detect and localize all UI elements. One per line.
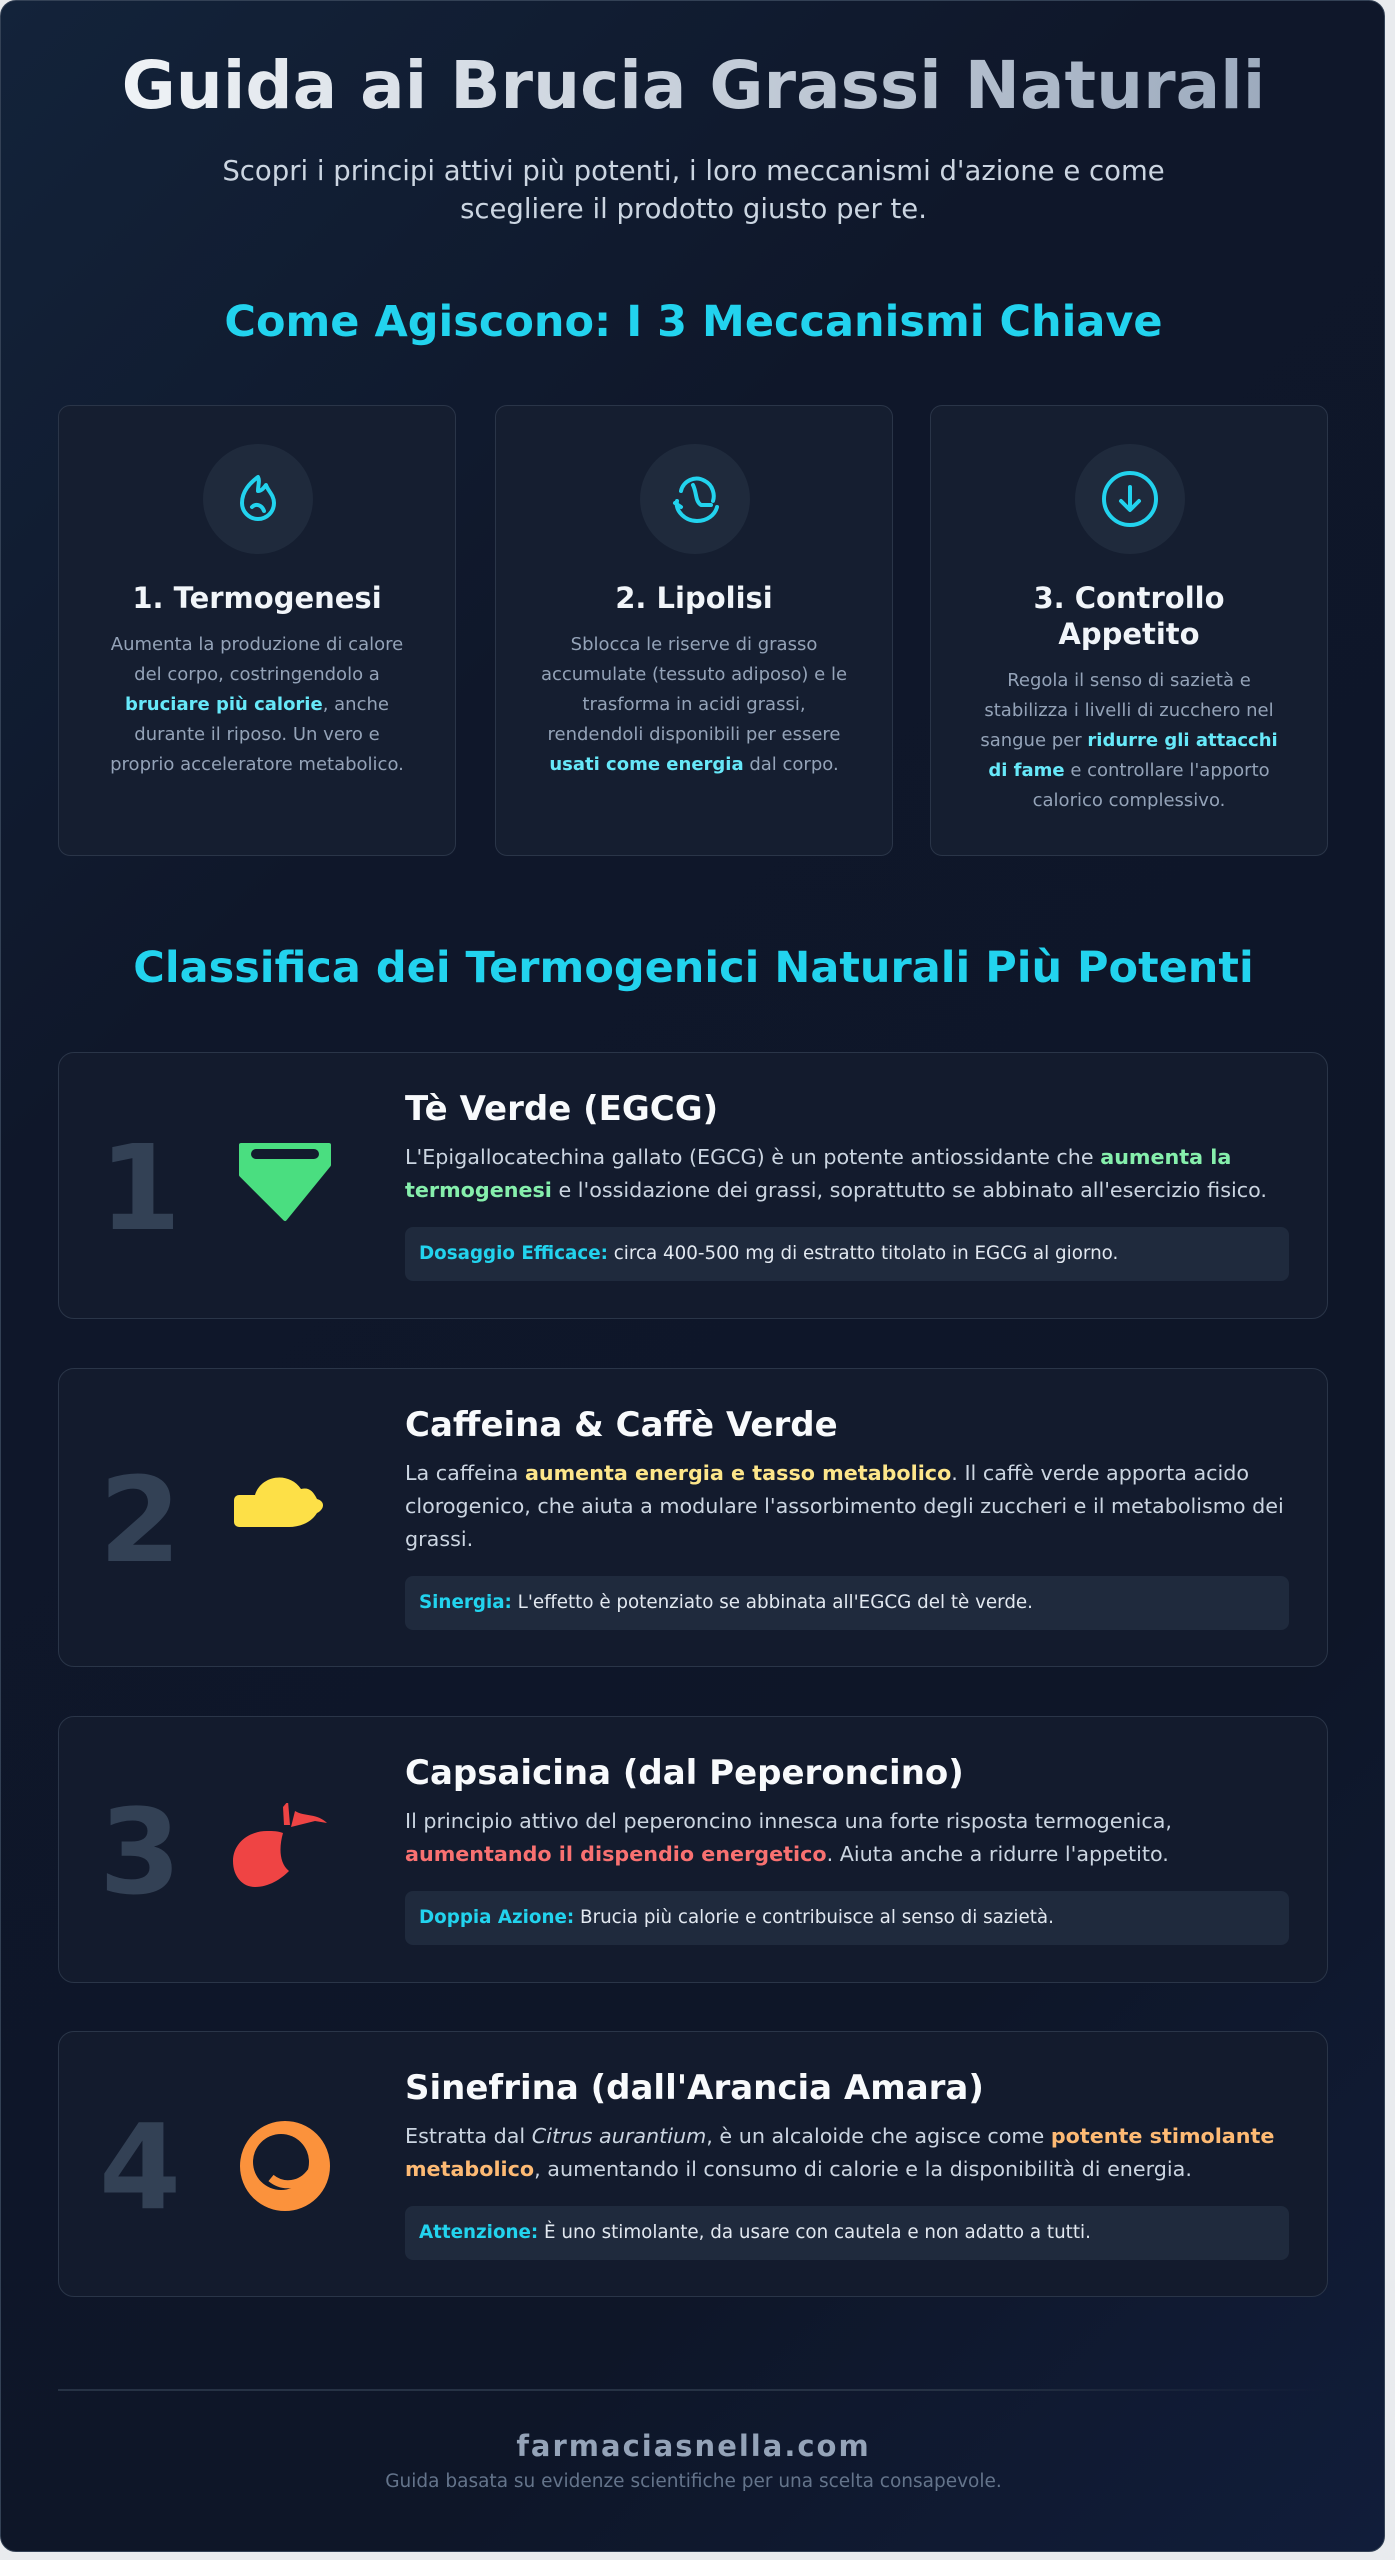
number 2: 2 bbox=[99, 1451, 181, 1589]
text: Tè Verde (EGCG) bbox=[405, 1089, 718, 1129]
card: sinefrina bbox=[58, 2031, 1328, 2297]
title: 1. Termogenesi bbox=[132, 581, 382, 615]
text: Regola il senso di sazietà e stabilizza i livelli di zucchero nel sangue per ridurre gli attacchi di fame e controllare l'apporto calorico complessivo. bbox=[980, 670, 1278, 811]
footer note: Guida basata su evidenze scientifiche per una scelta consapevole. bbox=[385, 2471, 1002, 2492]
callout: Attenzione: È uno stimolante, da usare con cautela e non adatto a tutti. bbox=[419, 2222, 1091, 2243]
title: 3. Controllo bbox=[1033, 581, 1225, 615]
card: caffeina bbox=[58, 1368, 1328, 1667]
callout bbox=[405, 1891, 1289, 1945]
callout: Dosaggio Efficace: circa 400-500 mg di estratto titolato in EGCG al giorno. bbox=[419, 1243, 1118, 1264]
number 3: 3 bbox=[99, 1783, 181, 1921]
text: Aumenta la produzione di calore del corpo, costringendolo a bruciare più calorie, anche durante il riposo. Un vero e proprio acceleratore metabolico. bbox=[110, 634, 404, 775]
card: capsaicina bbox=[58, 1716, 1328, 1983]
icon: lipolysis bbox=[640, 444, 750, 554]
icon: coffee bbox=[234, 1478, 323, 1527]
text: Sinefrina (dall'Arancia Amara) bbox=[405, 2068, 984, 2108]
number 1: 1 bbox=[99, 1119, 181, 1257]
text: Estratta dal Citrus aurantium, è un alcaloide che agisce come potente stimolante metabolico, aumentando il consumo di calorie e la disponibilità di energia. bbox=[405, 2124, 1274, 2181]
text: Sblocca le riserve di grasso accumulate (tessuto adiposo) e le trasforma in acidi grassi, rendendoli disponibili per essere usati come energia dal corpo. bbox=[541, 634, 847, 775]
text: Il principio attivo del peperoncino innesca una forte risposta termogenica, aumentando il dispendio energetico. Aiuta anche a ridurre l'appetito. bbox=[405, 1809, 1172, 1866]
panel: termogenesi bbox=[58, 405, 456, 856]
heading: mechanisms: Come Agiscono: I 3 Meccanismi Chiave bbox=[224, 297, 1163, 347]
icon: arrow down circle bbox=[1075, 444, 1185, 554]
card: te verde bbox=[58, 1052, 1328, 1319]
callout bbox=[405, 1576, 1289, 1630]
icon: tea leaf bbox=[239, 1143, 331, 1222]
callout: Sinergia: L'effetto è potenziato se abbinata all'EGCG del tè verde. bbox=[419, 1592, 1033, 1613]
icon: flame bbox=[203, 444, 313, 554]
text: L'Epigallocatechina gallato (EGCG) è un potente antiossidante che aumenta la termogenesi e l'ossidazione dei grassi, soprattutto se abbinato all'esercizio fisico. bbox=[405, 1145, 1267, 1202]
title: 2. Lipolisi bbox=[615, 581, 773, 615]
text: Capsaicina (dal Peperoncino) bbox=[405, 1753, 964, 1793]
icon: orange bbox=[240, 2121, 330, 2211]
heading: ranking: Classifica dei Termogenici Naturali Più Potenti bbox=[133, 943, 1254, 993]
title bbox=[1033, 581, 1225, 651]
panel: appetito bbox=[930, 405, 1328, 856]
text bbox=[405, 1089, 1289, 1281]
text: La caffeina aumenta energia e tasso metabolico. Il caffè verde apporta acido clorogenico, che aiuta a modulare l'assorbimento degli zuccheri e il metabolismo dei grassi. bbox=[405, 1461, 1284, 1551]
text bbox=[405, 1753, 1289, 1945]
icon: chili pepper bbox=[233, 1803, 327, 1887]
text bbox=[405, 1405, 1289, 1630]
callout: Doppia Azione: Brucia più calorie e contribuisce al senso di sazietà. bbox=[419, 1907, 1054, 1928]
panel: lipolisi bbox=[495, 405, 893, 856]
text: Caffeina & Caffè Verde bbox=[405, 1405, 838, 1445]
subtitle: Scopri i principi attivi più potenti, i loro meccanismi d'azione e come scegliere il prodotto giusto per te. bbox=[222, 155, 1165, 225]
callout bbox=[405, 1227, 1289, 1281]
number 4: 4 bbox=[99, 2098, 181, 2236]
text bbox=[405, 2068, 1289, 2260]
title: Appetito bbox=[1058, 617, 1200, 651]
footer brand: farmaciasnella.com bbox=[516, 2429, 871, 2463]
callout bbox=[405, 2206, 1289, 2260]
title: Guida ai Brucia Grassi Naturali bbox=[122, 47, 1265, 124]
